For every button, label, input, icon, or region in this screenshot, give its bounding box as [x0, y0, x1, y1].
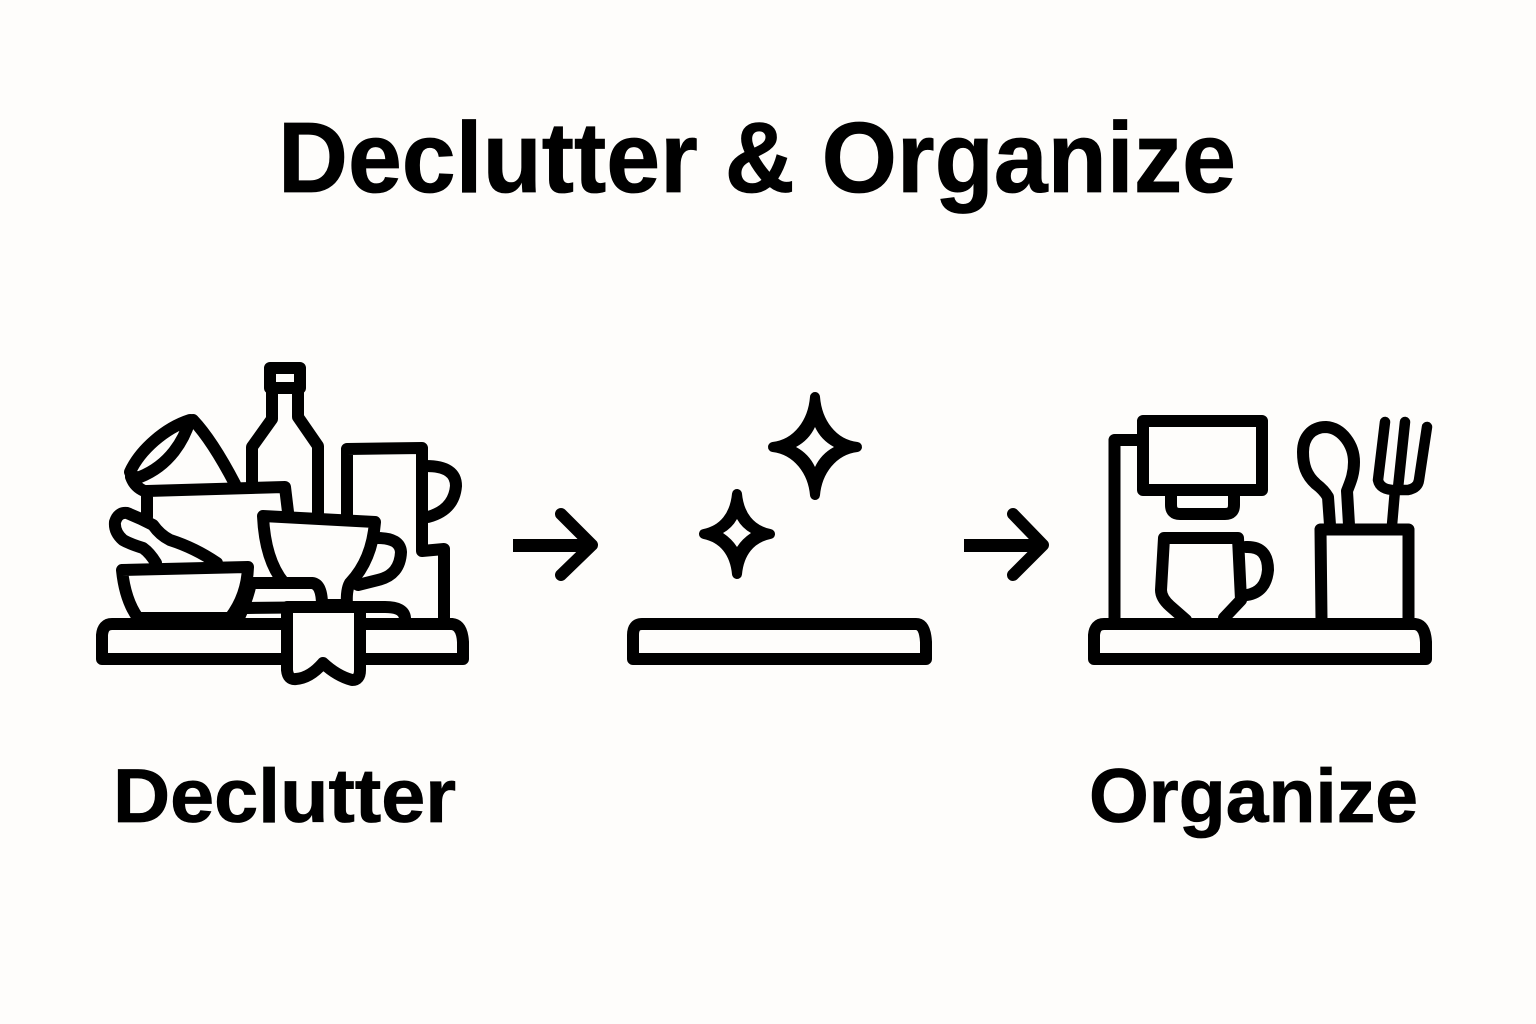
- icon: tall mug: [347, 448, 456, 620]
- icon: front cup: [263, 516, 401, 605]
- icon: utensil holder: [1320, 530, 1408, 620]
- icon: small bowl: [122, 567, 248, 618]
- label: declutter: Declutter: [113, 754, 456, 839]
- icon: empty shelf: [633, 624, 926, 659]
- panel: clean shelf with sparkles: [633, 397, 926, 659]
- panel: organized shelf icon: [1094, 421, 1427, 659]
- icon: towel: [287, 607, 360, 680]
- arrow: declutter to clean: [513, 514, 592, 575]
- icon: tilted bowl: [130, 420, 235, 492]
- icon: fork: [1378, 422, 1427, 525]
- icon: small sparkle: [704, 494, 770, 574]
- icon: bottle: [252, 368, 318, 513]
- icon: coffee mug: [1161, 538, 1268, 620]
- title: Declutter & Organize: [278, 102, 1236, 214]
- icon: plate stack: [238, 583, 405, 620]
- panel: cluttered shelf icon: [102, 368, 463, 680]
- icon: spoon: [1303, 427, 1354, 525]
- icon: shelf: [102, 624, 463, 659]
- icon: shelf: [1094, 624, 1426, 659]
- icon: large bowl: [147, 487, 288, 517]
- icon: coffee machine: [1114, 421, 1262, 620]
- arrow: clean to organized: [964, 514, 1043, 575]
- icon: spatula: [115, 513, 217, 563]
- label: organize: Organize: [1089, 754, 1418, 839]
- icon: large sparkle: [773, 397, 857, 495]
